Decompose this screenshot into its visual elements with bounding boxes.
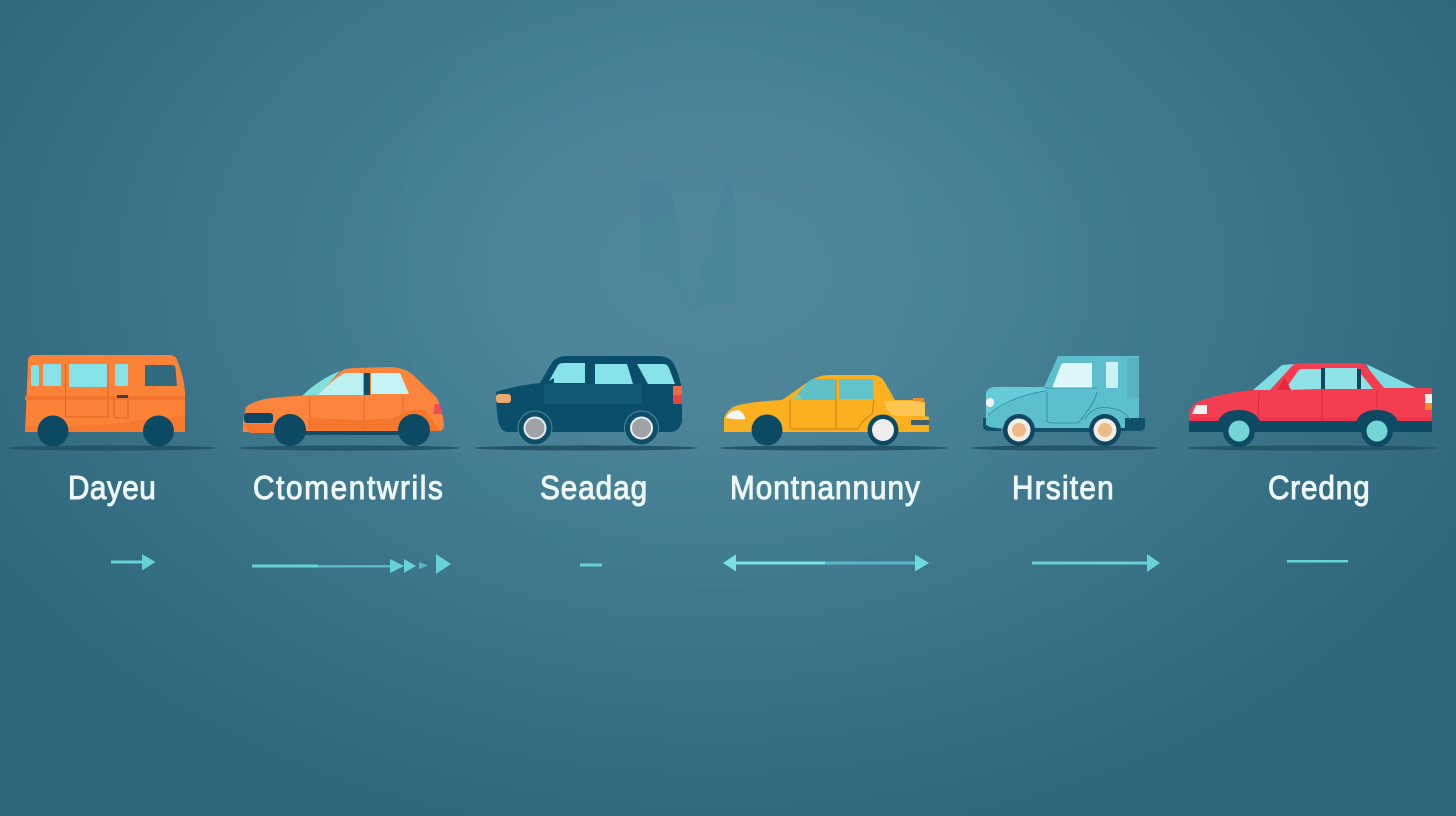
label: Montnannuny: Montnannuny xyxy=(730,470,920,506)
hatchback underbody xyxy=(300,431,405,435)
sedan door lines xyxy=(790,380,874,429)
red sedan lower trim xyxy=(1189,421,1432,432)
pickup door lines xyxy=(988,388,1130,423)
hatchback tail light xyxy=(433,404,442,414)
SUV body xyxy=(496,356,682,432)
hatchback door lines xyxy=(309,396,403,430)
label: Seadag: Seadag xyxy=(540,470,647,506)
arrow 3: short dash xyxy=(580,564,602,566)
red sedan lights xyxy=(1192,394,1432,414)
hatchback rear windshield xyxy=(302,371,340,396)
red sedan glass behind body xyxy=(1253,364,1416,390)
SUV wheels xyxy=(518,411,658,445)
van doors xyxy=(66,364,128,418)
arrow 4: double-headed xyxy=(723,554,929,572)
vehicle 6: red sedan xyxy=(1188,363,1438,451)
arrow 2: line with chevrons xyxy=(252,554,451,574)
arrow 1 xyxy=(111,554,156,570)
sedan rear bumper xyxy=(911,420,929,425)
SUV windows xyxy=(549,363,675,384)
sedan windows xyxy=(792,379,874,400)
van windows xyxy=(31,364,177,387)
pickup shadow xyxy=(971,445,1159,451)
arrow 5 xyxy=(1032,554,1160,572)
pickup bumpers xyxy=(983,418,1145,432)
vehicle 3: navy SUV xyxy=(474,356,698,451)
vehicle 4: yellow sedan xyxy=(720,375,948,451)
red sedan wheel arches xyxy=(1217,410,1400,428)
label: Dayeu: Dayeu xyxy=(68,470,156,506)
sedan wheels xyxy=(752,414,898,446)
pickup windows xyxy=(1052,362,1118,388)
vehicle 2: orange hatchback xyxy=(239,367,459,451)
hatchback headlight grille xyxy=(244,413,273,423)
red sedan shadow xyxy=(1188,445,1438,451)
label: Credng: Credng xyxy=(1268,470,1370,506)
SUV shadow xyxy=(474,445,698,451)
red sedan door lines xyxy=(1258,390,1377,425)
van shadow xyxy=(8,445,216,451)
red sedan windows xyxy=(1277,368,1373,390)
pickup body xyxy=(986,356,1139,428)
pickup wheels xyxy=(1003,414,1121,446)
arrow 6: thin dash xyxy=(1287,560,1348,562)
red sedan wheels xyxy=(1223,415,1393,447)
vehicle 1: orange van xyxy=(8,355,216,451)
hatchback wheels xyxy=(274,414,430,446)
van wheels xyxy=(38,416,174,446)
sedan headlight xyxy=(726,410,745,419)
hatchback windows xyxy=(318,373,409,395)
hatchback body xyxy=(243,367,444,432)
sedan shadow xyxy=(720,445,948,451)
sedan body xyxy=(724,375,929,432)
SUV head and tail lights xyxy=(496,386,682,404)
hatchback shadow xyxy=(239,445,459,451)
label: Hrsiten: Hrsiten xyxy=(1012,470,1114,506)
label: Ctomentwrils: Ctomentwrils xyxy=(253,470,443,506)
van body xyxy=(25,355,185,432)
red sedan body xyxy=(1189,363,1432,425)
vehicle 5: teal pickup xyxy=(971,356,1159,451)
pickup headlight xyxy=(986,398,994,407)
